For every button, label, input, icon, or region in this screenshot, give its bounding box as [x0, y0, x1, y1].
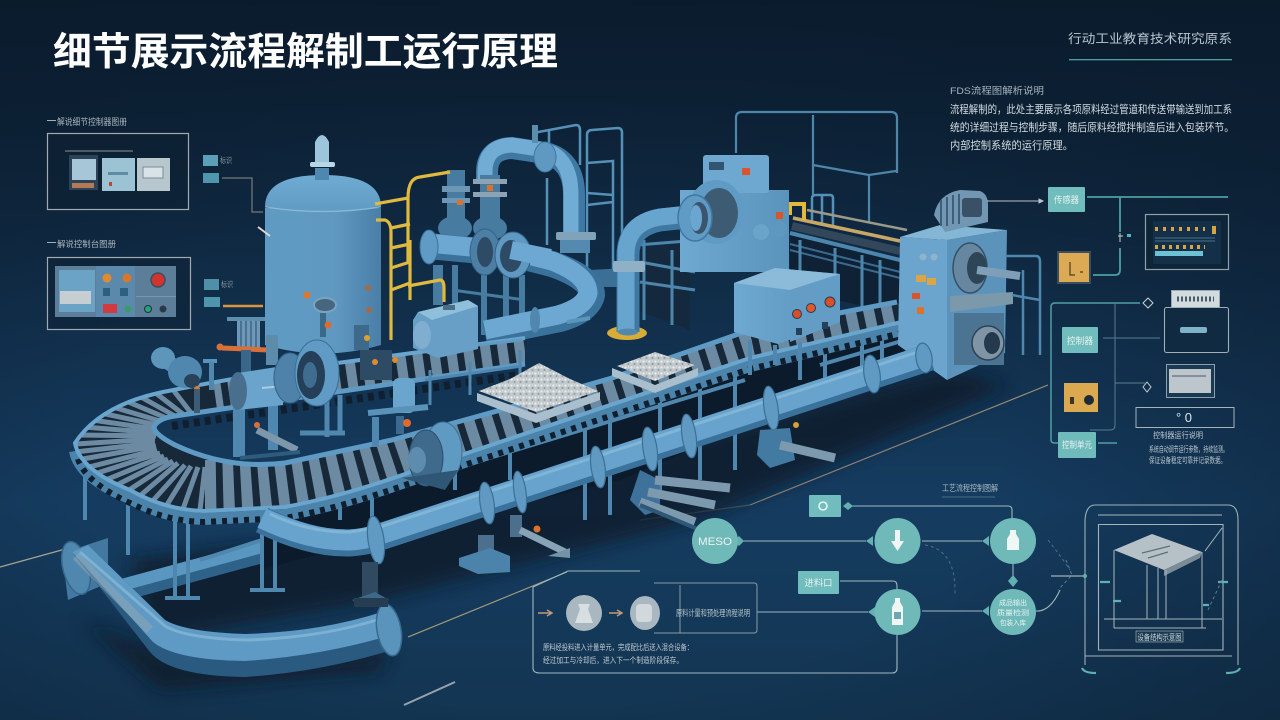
box: yellow gauge [1057, 251, 1091, 284]
connector lines [1051, 303, 1140, 443]
material tray 2 [612, 352, 698, 393]
panel: blueprint [1051, 505, 1240, 673]
panel: small screen [1166, 364, 1214, 398]
box: teal sensor [1048, 187, 1085, 212]
process notes: 原料经投料进入计量单元，完成配比后送入混合设备： [543, 642, 693, 652]
pump motor box [413, 300, 522, 358]
icon: small valve left [151, 347, 202, 413]
box: teal sensor 2: 控制器 [1067, 335, 1093, 346]
panel: dashboard screen [1146, 214, 1228, 270]
pipe: back straight [122, 547, 262, 590]
panel: input process [538, 583, 757, 665]
heading: control console: 解说控制台图册 [57, 238, 116, 249]
icon: handwheel valve [314, 298, 398, 380]
icon: pump tall [203, 306, 278, 390]
conveyor main loop [75, 302, 910, 600]
heading: monitor devices: 解说细节控制器图册 [57, 116, 127, 127]
node: source [692, 518, 738, 564]
flow heading [942, 483, 998, 497]
under conveyor cavity [260, 322, 905, 570]
icon: main flange pump [229, 340, 345, 458]
title: 细节展示流程解制工运行原理 [53, 31, 558, 74]
pipe: top arch left [485, 125, 596, 253]
process notes [543, 642, 693, 665]
belt side wall [75, 328, 910, 519]
icon: belt flange [402, 422, 462, 490]
machine: gearbox center [637, 155, 789, 330]
description text block: 内部控制系统的运行原理。 [950, 138, 1073, 152]
floor shadow [80, 370, 1010, 690]
dashed curves [925, 540, 1070, 595]
process notes: 经过加工与冷却后，进入下一个制造阶段保存。 [543, 655, 683, 665]
description text block: FDS流程图解析说明 [950, 85, 1044, 97]
pipe flanges [365, 342, 934, 565]
storage tank [258, 135, 381, 354]
left pump cluster [151, 298, 462, 490]
material tray 1 [477, 363, 600, 423]
icon: device monitors [65, 150, 170, 191]
machine: right press [898, 190, 1040, 380]
icon: diamond node mid [1143, 382, 1151, 392]
node: arrow down [874, 518, 920, 564]
small tags and leader line upper: 标识 [220, 155, 232, 165]
support 4 triple lever [630, 470, 730, 530]
node: source: MESO [698, 536, 732, 548]
pipe: vertical riser with yellow base [607, 195, 712, 340]
support 5 lever [757, 422, 835, 468]
small tags lower: 标识 [221, 279, 233, 289]
belt rails [75, 320, 910, 511]
box: clock tag [809, 495, 841, 517]
panel: control console [47, 238, 190, 330]
top right caption: 行动工业教育技术研究原系 [1068, 31, 1232, 46]
right middle flow [1051, 290, 1234, 465]
blueprint label: 设备结构示意图 [1138, 632, 1182, 642]
box: teal label [1058, 432, 1096, 458]
node: bottle [990, 518, 1036, 564]
back rail conveyor [790, 195, 907, 325]
box: label tag [798, 571, 839, 594]
back frame center [736, 112, 897, 222]
readout bar: ° 0 [1176, 410, 1192, 425]
wires [1090, 303, 1160, 430]
node: output: 成品输出 [999, 598, 1027, 607]
main diagonal pipe [262, 342, 934, 565]
arrow mid [609, 610, 622, 616]
node: output: 质量检测 [997, 608, 1029, 617]
lower return pipe [56, 538, 405, 677]
node: output [990, 589, 1036, 635]
connector lines [533, 506, 1060, 673]
pipe supports lower [352, 422, 835, 607]
description text block: 流程解制的，此处主要展示各项原料经过管道和传送带输送到加工系 [950, 102, 1232, 116]
process flow diagram [533, 483, 1070, 673]
connector lines [1087, 197, 1228, 275]
icon: diamond node top [1143, 298, 1153, 308]
blueprint label [1136, 631, 1183, 642]
belt inner wall [172, 374, 525, 426]
icon: motor head [934, 190, 988, 232]
yellow ladder and pipes [375, 172, 450, 340]
small tags lower [204, 279, 233, 307]
blueprint brackets [1085, 505, 1238, 665]
belt slats [75, 311, 905, 510]
readout notes: 保证设备稳定可靠并记录数据。 [1149, 455, 1226, 465]
readout notes [1149, 430, 1228, 465]
belt surface [75, 302, 910, 511]
description text block [950, 85, 1234, 152]
node: bottle lower [874, 589, 920, 635]
flow heading: 工艺流程控制图解 [942, 483, 998, 493]
conveyor legs [85, 330, 905, 600]
upper conveyor support [425, 350, 522, 405]
box: yellow gauge 2 [1064, 383, 1098, 412]
readout notes: 控制器运行说明 [1153, 430, 1203, 440]
support 3 lever [510, 515, 570, 558]
readout notes: 系统自动调节运行参数，持续监测。 [1149, 444, 1228, 454]
process label: 原料计量和预处理流程说明 [676, 608, 750, 618]
floor guide lines [0, 385, 1048, 705]
support 1 [352, 562, 389, 607]
icon: wall flange [56, 538, 108, 600]
readout bar [1136, 408, 1234, 428]
box: teal sensor 2 [1062, 327, 1098, 353]
box: teal sensor: 传感器 [1054, 194, 1079, 205]
support 2 [459, 535, 510, 574]
arrow: head to sensor [987, 199, 1043, 203]
arrowheads [734, 502, 1018, 617]
icon: pipe end flange [373, 602, 405, 658]
valves behind pipe [433, 170, 525, 335]
right upper flow [987, 187, 1228, 284]
icon: front valve [368, 378, 428, 447]
pipe: horizontal S-bend [420, 229, 592, 334]
arrow in [538, 610, 552, 616]
icon: drum circle [630, 596, 660, 630]
small tags and leader line upper [203, 155, 263, 212]
box: label tag: 进料口 [804, 577, 832, 588]
back frame left [533, 125, 625, 287]
description text block: 统的详细过程与控制步骤，随后原料经搅拌制造后进入包装环节。 [950, 120, 1234, 134]
icon: junction mark [1118, 233, 1131, 242]
box: teal label: 控制单元 [1062, 439, 1092, 450]
inner outline [654, 583, 757, 633]
pipe: U bend [72, 545, 392, 677]
panel: monitor devices [47, 116, 188, 210]
blueprint ticks [1100, 582, 1228, 605]
icon: console panel [55, 266, 176, 317]
icon: bag circle [566, 595, 602, 631]
node: output: 包装入库 [1000, 618, 1026, 627]
panel: device screen [1164, 290, 1228, 352]
blueprint plate [1114, 534, 1202, 576]
control box center [734, 268, 840, 380]
